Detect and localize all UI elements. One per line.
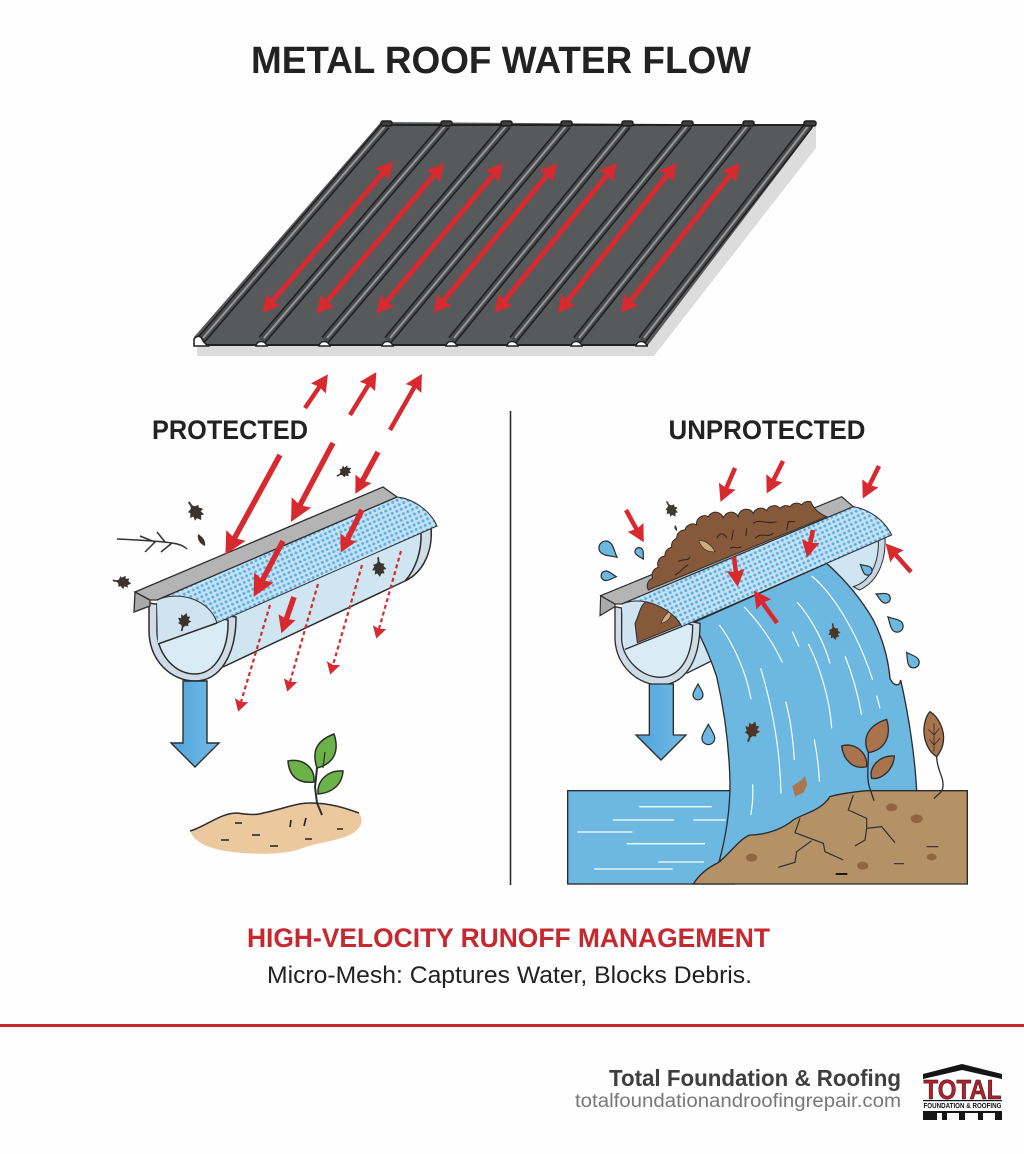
leaves in water: [826, 622, 842, 641]
panel: unprotected gutter: [568, 497, 967, 884]
debris twig: [117, 532, 187, 552]
debris pile: [647, 501, 827, 590]
gutter end cap with debris: [615, 607, 700, 685]
divider between panels: [510, 411, 512, 885]
healthy soil and plant: [190, 734, 362, 854]
arrows rising between roof and gutter: [305, 384, 415, 430]
title: METAL ROOF WATER FLOW: [251, 40, 751, 82]
roof panel with water flow arrows: [194, 121, 816, 356]
downspout arrow: [171, 681, 219, 767]
caption: Micro-Mesh: Captures Water, Blocks Debris.: [267, 962, 752, 989]
gutter end cap: [149, 603, 236, 681]
micro-mesh cover: [157, 497, 437, 623]
gutter body: [217, 532, 421, 667]
heading: protected: PROTECTED: [152, 415, 308, 445]
metal flange: [134, 592, 150, 612]
waterfall overflow: [693, 563, 917, 861]
footer rule: [0, 1024, 1024, 1027]
wilted plants: [868, 752, 943, 801]
panel: protected gutter: [112, 443, 437, 767]
red water arrows: [234, 443, 378, 620]
falling leaves: [112, 463, 354, 590]
gutter body: [682, 539, 878, 673]
pool of water: [568, 791, 734, 884]
footer website: totalfoundationandroofingrepair.com: [575, 1091, 901, 1112]
micro-mesh cover: [622, 507, 892, 627]
company logo: FOUNDATION & ROOFING: [924, 1103, 1002, 1110]
water droplets: [596, 538, 921, 745]
dotted filtered flow arrows: [241, 551, 401, 702]
company logo: TOTAL: [924, 1074, 1002, 1105]
metal flange: [600, 596, 615, 616]
red pressure arrows: [626, 461, 911, 623]
heading: unprotected: UNPROTECTED: [668, 415, 866, 445]
eroded ground: [693, 791, 967, 884]
footer company name: Total Foundation & Roofing: [609, 1065, 901, 1091]
subheading: HIGH-VELOCITY RUNOFF MANAGEMENT: [247, 923, 770, 953]
downspout arrow: [636, 684, 686, 760]
company logo: [923, 1064, 1002, 1120]
